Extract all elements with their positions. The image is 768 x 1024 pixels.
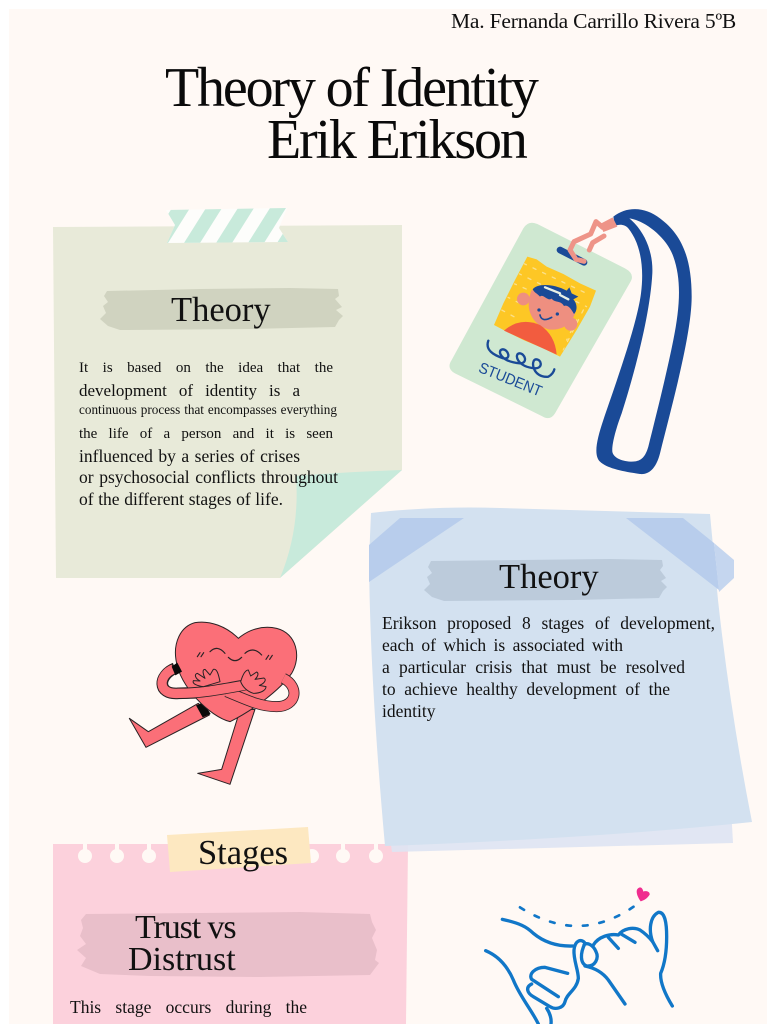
- panel: theory (green note): the life of a person and it is seen: [79, 426, 333, 442]
- icon: student id badge with lanyard: [450, 209, 692, 474]
- panel: stages (pink note): This stage occurs during the: [70, 997, 307, 1017]
- panel: theory (green note): Theory: [171, 291, 271, 329]
- panel: stages (pink note): Stages: [198, 834, 288, 872]
- icon: student id badge with lanyard: STUDENT: [476, 360, 545, 401]
- panel: theory (green note): development of identity is a: [79, 381, 300, 400]
- panel: theory (green note): influenced by a series of crises: [79, 446, 300, 466]
- author name: Ma. Fernanda Carrillo Rivera 5ºB: [451, 9, 736, 33]
- panel: stages (pink note): Distrust: [128, 940, 236, 978]
- panel: theory (blue note): [369, 508, 752, 852]
- panel: theory (green note): continuous process that encompasses everything: [79, 402, 337, 417]
- title: Erik Erikson: [267, 109, 526, 171]
- panel: theory (blue note): to achieve healthy development of the: [382, 679, 670, 699]
- panel: theory (blue note): each of which is associated with: [382, 635, 623, 655]
- panel: theory (green note): or psychosocial conflicts throughout: [79, 467, 338, 487]
- panel: theory (blue note): Theory: [499, 558, 599, 596]
- panel: stages (pink note): [53, 827, 408, 1024]
- title: Theory of Identity: [165, 57, 537, 119]
- panel: stages (pink note): Trust vs: [135, 908, 236, 946]
- icon: hugging heart character: [128, 622, 300, 785]
- panel: theory (green note): It is based on the idea that the: [79, 360, 333, 376]
- panel: theory (green note): [53, 208, 402, 578]
- icon: pinky promise hands: [484, 887, 674, 1024]
- panel: theory (blue note): Erikson proposed 8 stages of development,: [382, 613, 715, 633]
- panel: theory (blue note): a particular crisis that must be resolved: [382, 657, 685, 677]
- panel: theory (blue note): identity: [382, 701, 435, 721]
- panel: theory (green note): of the different stages of life.: [79, 489, 283, 509]
- title: [165, 57, 539, 171]
